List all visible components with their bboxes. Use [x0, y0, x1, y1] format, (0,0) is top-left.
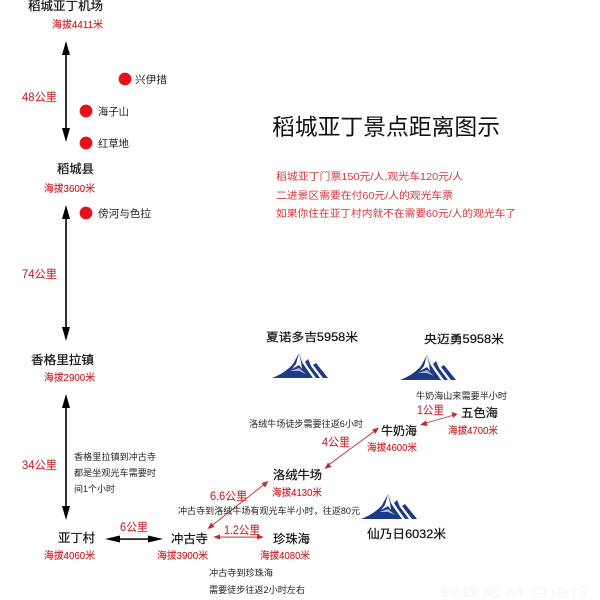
- note: sightseeing bus time: 香格里拉镇到冲古寺: [74, 451, 156, 462]
- location: Chonggu temple: 冲古寺: [171, 531, 208, 546]
- distance: 1.2 km: 1.2公里: [224, 524, 260, 537]
- arrow: Milk lake to Five Color lake: [420, 412, 458, 426]
- icon: mountain Xiannuoduoji: [272, 353, 328, 378]
- distance: 1 km: 1公里: [417, 404, 444, 417]
- arrow: Chonggu temple to Pearl lake: [213, 534, 264, 540]
- scenic spot: Banghe and Sela: 傍河与色拉: [98, 207, 152, 220]
- distance: 34 km: 34公里: [22, 459, 57, 472]
- note: walk to Pearl lake: 冲古寺到珍珠海: [209, 567, 273, 578]
- location: Five Color lake: 五色海: [461, 405, 498, 420]
- location: Daocheng county: [44, 162, 95, 195]
- location: Luorong pasture: 洛绒牛场: [273, 467, 322, 482]
- peak label: Xiannairi: 仙乃日6032米: [367, 527, 446, 541]
- location: Daocheng county: 稻城县: [57, 162, 94, 176]
- peak label: Xiannuoduoji: 夏诺多吉5958米: [266, 330, 359, 344]
- location: Daocheng Yading airport: 海拔4411米: [52, 18, 103, 31]
- note: walk to Pearl lake: 需要徒步往返2小时左右: [209, 584, 305, 595]
- location: Five Color lake: 海拔4700米: [448, 424, 498, 437]
- location: Milk lake: 海拔4600米: [367, 441, 417, 454]
- location: Pearl lake: 海拔4080米: [260, 549, 310, 562]
- icon: mountain Yangmaiyong: [400, 355, 456, 380]
- location: Luorong pasture: [272, 467, 322, 499]
- location: Daocheng Yading airport: [28, 0, 103, 31]
- location: Milk lake: 牛奶海: [381, 423, 417, 438]
- distance: 4 km: 4公里: [322, 436, 350, 449]
- location: Shangri-La town: 海拔2900米: [44, 371, 95, 384]
- scenic spot: Haizi Shan: [80, 105, 129, 118]
- location: Chonggu temple: 海拔3900米: [157, 549, 208, 562]
- arrow: Luorong pasture to Milk lake: [324, 428, 379, 469]
- scenic spot: Hongcao Di: 红草地: [98, 137, 129, 150]
- note: walk to Five Color lake: 牛奶海山来需要半小时: [416, 390, 507, 401]
- location: Chonggu temple: [157, 531, 208, 562]
- scenic spot: Xingyi Cuo: 兴伊措: [135, 73, 168, 86]
- location: Pearl lake: [260, 531, 310, 562]
- distance: 48 km: 48公里: [22, 91, 57, 104]
- title: 稻城亚丁景点距离图示: [272, 114, 500, 140]
- scenic spot: Xingyi Cuo: [119, 73, 168, 86]
- scenic spot: Banghe and Sela: [80, 207, 152, 220]
- peak label: Yangmaiyong: 央迈勇5958米: [424, 333, 505, 346]
- note: sightseeing bus time: 间1个小时: [74, 483, 115, 494]
- arrow: airport to Daocheng county: [62, 41, 70, 142]
- location: Milk lake: [367, 423, 417, 454]
- note: sightseeing bus time: 都是坐观光车需要时: [74, 467, 156, 478]
- location: Yading village: 亚丁村: [58, 531, 95, 545]
- scenic spot: Haizi Shan: 海子山: [98, 105, 129, 118]
- ticket information text: [276, 170, 516, 220]
- arrow: Yading village to Chonggu temple: [105, 536, 163, 542]
- scenic spot: Hongcao Di: [80, 137, 129, 150]
- ticket information text: 稻城亚丁门票150元/人,观光车120元/人: [276, 170, 463, 183]
- note: walk to Luorong pasture: 洛绒牛场徒步需要往返6小时: [249, 418, 363, 429]
- distance: 74 km: 74公里: [22, 268, 57, 281]
- note: bus to Luorong pasture: 冲古寺到洛绒牛场有观光车半小时，往返80元: [178, 505, 360, 516]
- arrow: Daocheng county to Shangri-La town: [62, 205, 70, 341]
- location: Luorong pasture: 海拔4130米: [272, 486, 322, 499]
- arrow: Chonggu temple to Luorong pasture: [208, 481, 268, 529]
- location: Five Color lake: [448, 405, 498, 437]
- location: Yading village: [44, 531, 95, 562]
- arrow: Shangri-La town to Yading village: [62, 394, 70, 520]
- icon: mountain Xiannairi: [361, 494, 417, 519]
- location: Shangri-La town: [31, 352, 95, 384]
- distance: 6.6 km: 6.6公里: [210, 490, 247, 503]
- location: Daocheng county: 海拔3600米: [44, 182, 95, 195]
- ticket information text: 如果你住在亚丁村内就不在需要60元/人的观光车了: [276, 207, 516, 220]
- location: Yading village: 海拔4060米: [44, 549, 95, 562]
- watermark: 蚂蜂窝 M 自由行: [440, 585, 590, 600]
- note: walk to Pearl lake: [209, 567, 305, 595]
- distance: 6 km: 6公里: [120, 521, 148, 534]
- location: Pearl lake: 珍珠海: [273, 531, 310, 546]
- location: Shangri-La town: 香格里拉镇: [31, 352, 94, 367]
- note: sightseeing bus time: [74, 451, 156, 494]
- ticket information text: 二进景区需要在付60元/人的观光车票: [276, 189, 453, 202]
